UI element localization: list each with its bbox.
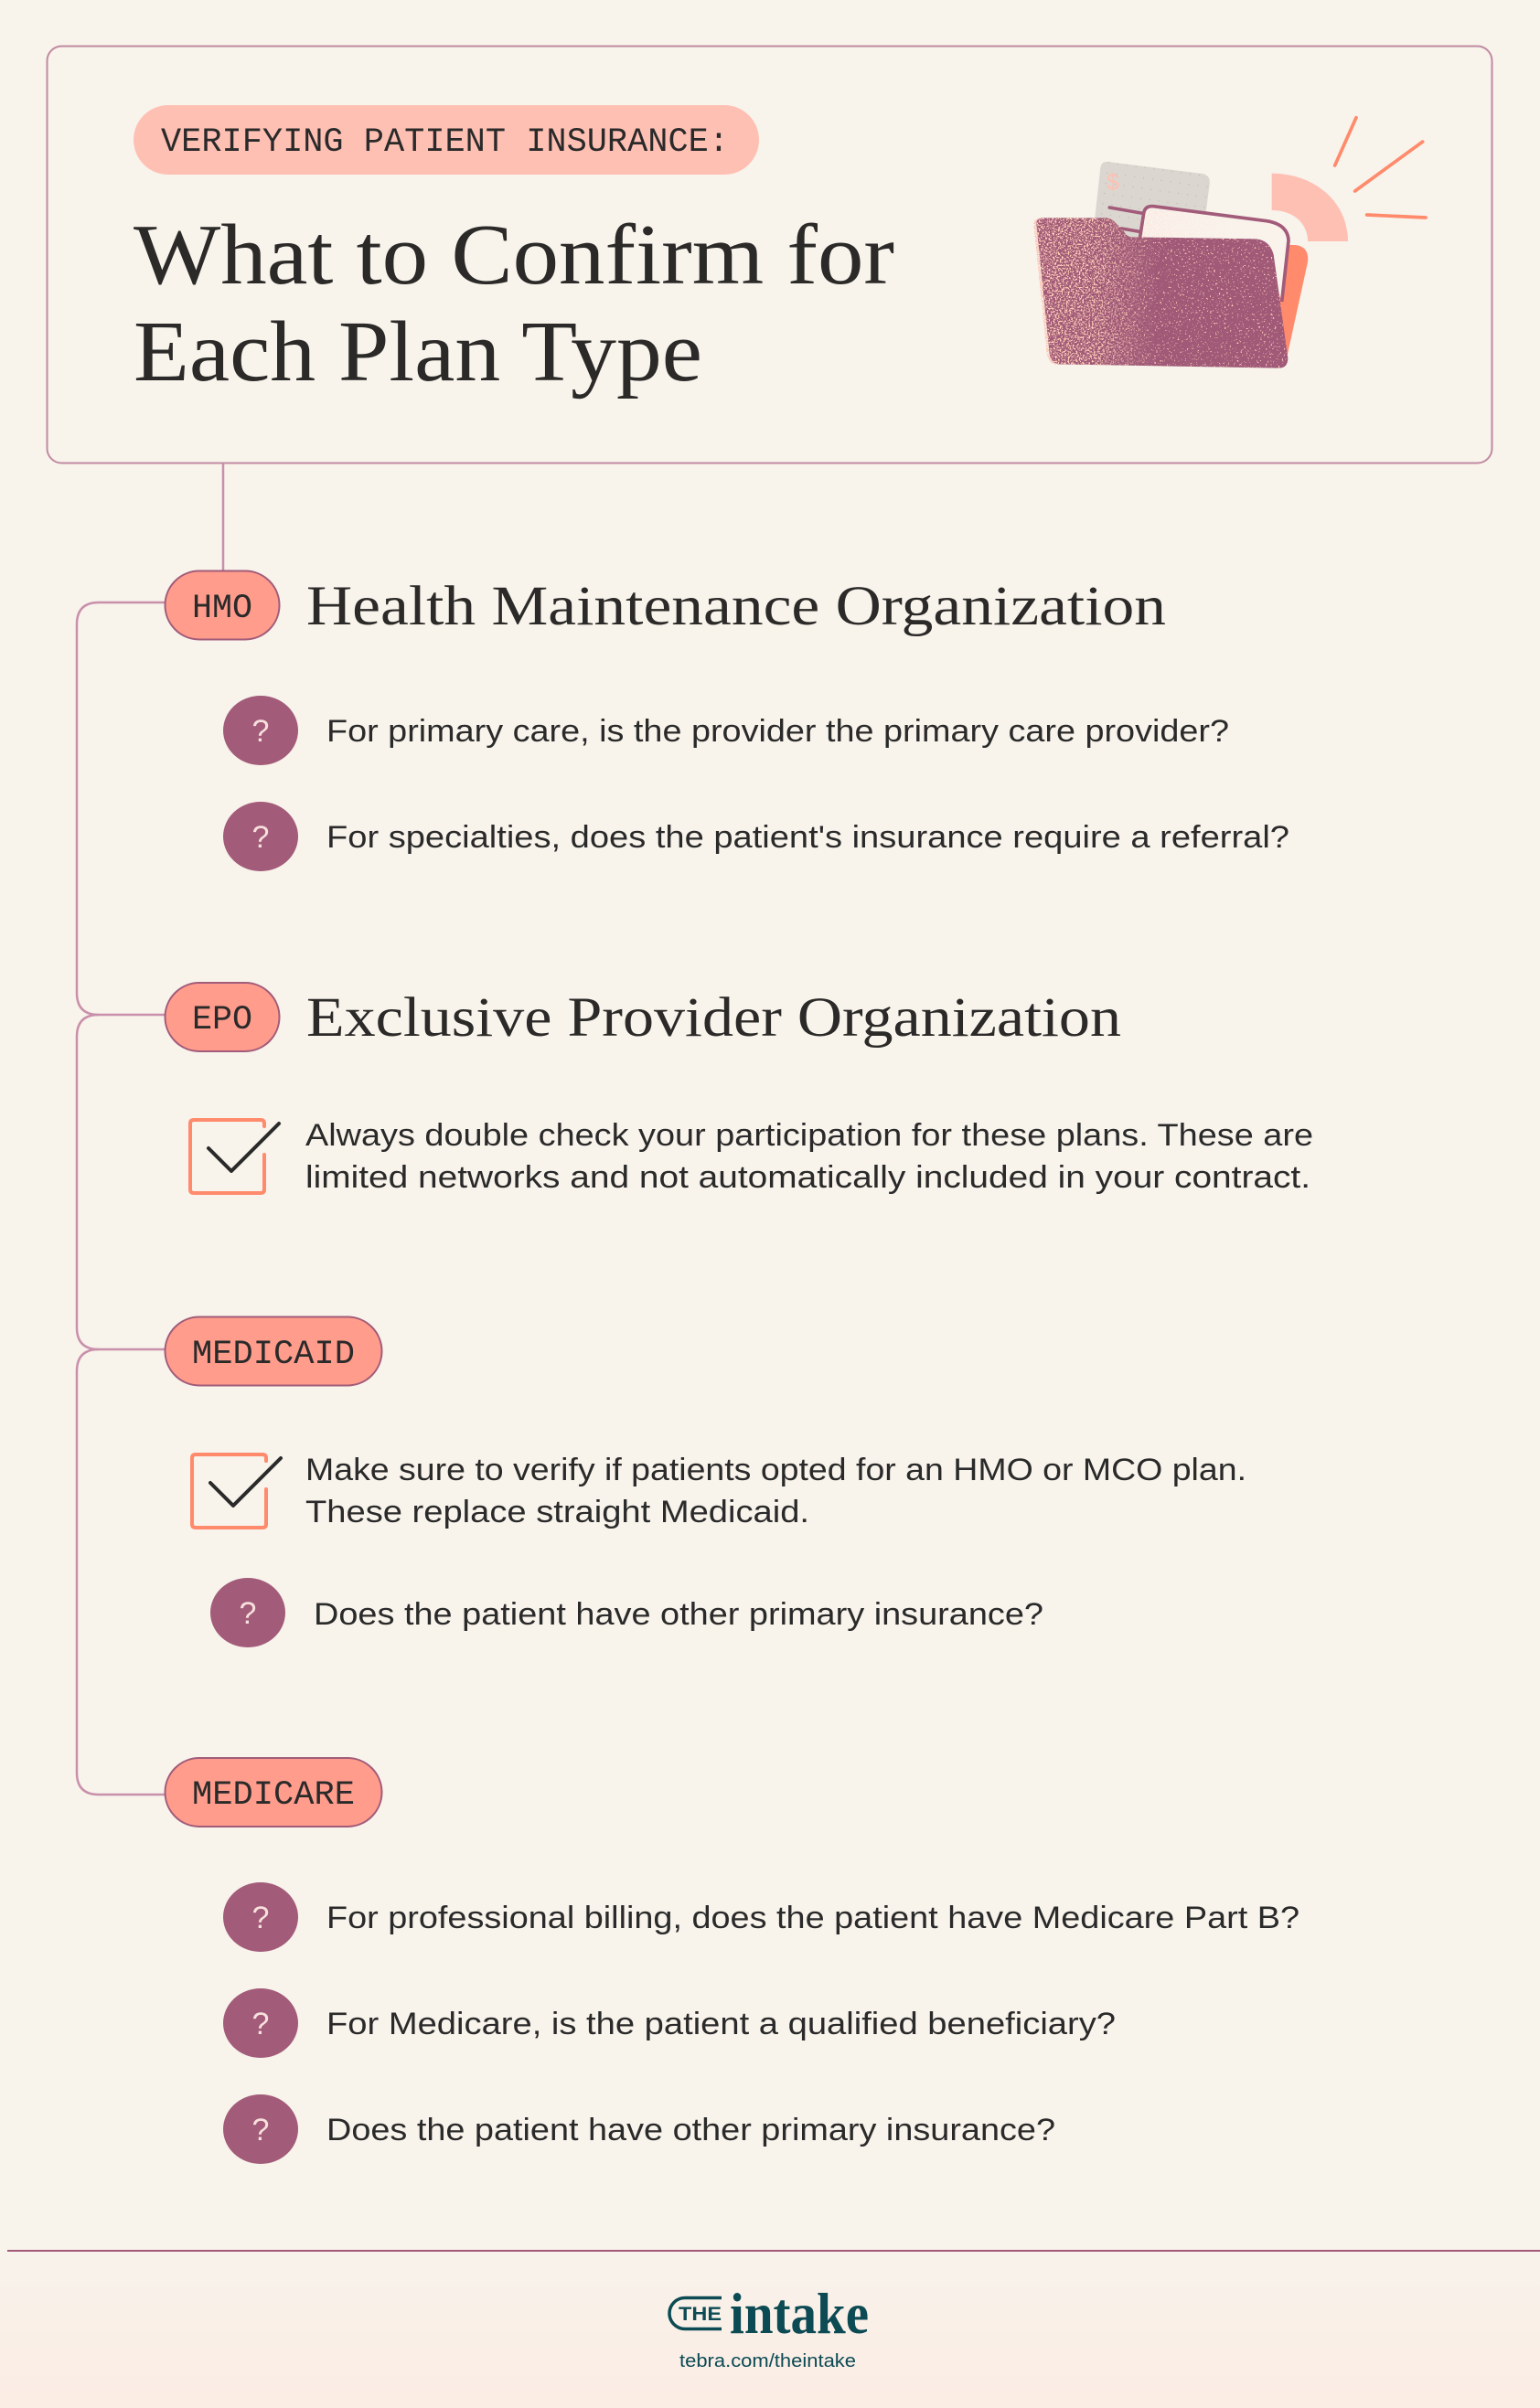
icon: folder with documents and burst: $	[1107, 169, 1119, 195]
pill: MEDICARE: MEDICARE	[192, 1776, 355, 1815]
pill: MEDICARE	[165, 1758, 382, 1827]
logo: The Intake: intake	[730, 2281, 869, 2346]
question item: other insurance: Does the patient have other primary insurance?	[314, 1597, 1043, 1632]
question item: other insurance	[223, 2094, 1055, 2164]
question item: other insurance: Does the patient have other primary insurance?	[326, 2113, 1055, 2147]
footer divider	[7, 2250, 1540, 2252]
connector lines	[77, 463, 223, 1795]
eyebrow badge: VERIFYING PATIENT INSURANCE:	[161, 123, 729, 162]
checkbox note: participation: limited networks and not automatically included in your contract.	[305, 1160, 1310, 1195]
question item: primary care: For primary care, is the provider the primary care provider?	[326, 714, 1229, 749]
logo: The Intake	[669, 2281, 869, 2346]
question item: specialties: For specialties, does the patient's insurance require a referral?	[326, 820, 1289, 855]
section: Medicaid	[165, 1316, 1246, 1647]
pill: EPO	[165, 983, 280, 1051]
question item: other insurance	[210, 1578, 1043, 1647]
pill: MEDICAID	[165, 1316, 382, 1386]
question item: Part B	[223, 1882, 1299, 1952]
header panel	[48, 46, 1492, 463]
question item: specialties: ?	[252, 820, 269, 855]
pill: HMO: HMO	[192, 590, 252, 628]
logo: The Intake: THE	[679, 2304, 722, 2325]
title	[134, 208, 894, 400]
question item: primary care: ?	[252, 714, 269, 749]
pill: EPO: EPO	[192, 1001, 252, 1039]
checkbox note: participation	[190, 1118, 1313, 1195]
question item: specialties	[223, 802, 1289, 871]
question item: other insurance: ?	[240, 1596, 256, 1631]
question item: beneficiary: For Medicare, is the patient a qualified beneficiary?	[326, 2007, 1116, 2041]
question item: beneficiary: ?	[252, 2007, 269, 2041]
title: What to Confirm for	[134, 208, 894, 303]
icon: folder with documents and burst	[1031, 118, 1426, 372]
question item: other insurance: ?	[252, 2113, 269, 2147]
eyebrow badge	[134, 105, 759, 175]
heading: EPO: Exclusive Provider Organization	[306, 987, 1121, 1049]
checkbox note: HMO or MCO: These replace straight Medicaid.	[305, 1495, 809, 1529]
question item: beneficiary	[223, 1988, 1116, 2058]
checkbox note: participation: Always double check your participation for these plans. These are	[305, 1118, 1313, 1153]
footer url: tebra.com/theintake	[679, 2351, 856, 2371]
section: HMO	[165, 570, 1289, 871]
section: Medicare	[165, 1758, 1299, 2164]
pill: MEDICAID: MEDICAID	[192, 1336, 355, 1374]
pill: HMO	[165, 570, 280, 640]
checkbox note: HMO or MCO	[192, 1453, 1246, 1529]
question item: primary care	[223, 696, 1229, 765]
question item: Part B: For professional billing, does the patient have Medicare Part B?	[326, 1901, 1299, 1935]
question item: Part B: ?	[252, 1901, 269, 1935]
title: Each Plan Type	[134, 304, 702, 400]
section: EPO	[165, 983, 1313, 1195]
footer band	[0, 2251, 1540, 2408]
heading: HMO: Health Maintenance Organization	[306, 576, 1166, 637]
checkbox note: HMO or MCO: Make sure to verify if patients opted for an HMO or MCO plan.	[305, 1453, 1246, 1487]
